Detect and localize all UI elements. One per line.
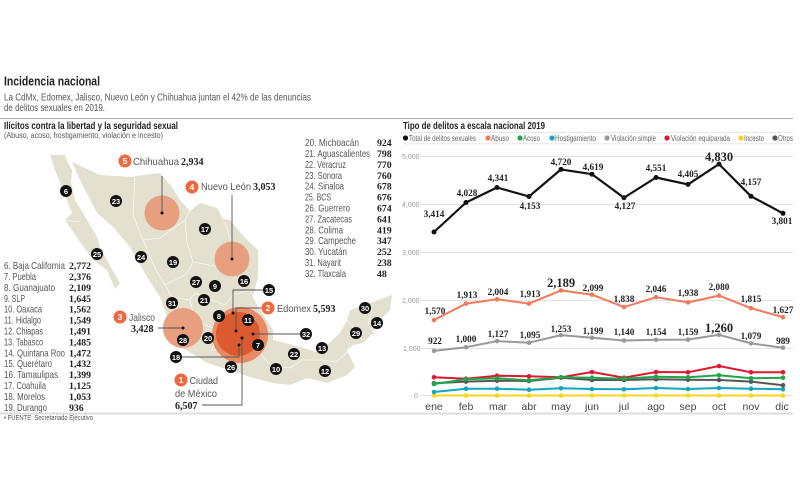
state ranking list right: 26. Guerrero <box>305 202 350 214</box>
x axis months: may <box>551 401 572 413</box>
state ranking list left: 1,485 <box>69 338 91 348</box>
y axis and grid: 1,000 <box>403 346 421 353</box>
y axis and grid <box>402 154 793 400</box>
callout: Edomex: 5,593 <box>313 304 336 315</box>
legend: Abuso <box>491 134 509 143</box>
callout: Jalisco: 3 <box>118 312 123 322</box>
series: total de delitos sexuales: 4,619 <box>583 162 604 172</box>
state number badges: 18 <box>172 353 180 362</box>
state ranking list right: 252 <box>377 247 392 258</box>
x axis months: sep <box>680 401 697 413</box>
state ranking list left: 12. Chiapas <box>4 326 43 338</box>
state ranking list left: 2,772 <box>69 261 91 272</box>
series: total de delitos sexuales: 4,127 <box>615 201 636 211</box>
series: violación simple: 1,140 <box>614 327 635 337</box>
state number badges: 30 <box>361 304 369 313</box>
series: violación simple: 1,127 <box>488 329 509 339</box>
series: violación simple <box>428 321 790 353</box>
state ranking list right: 20. Michoacán <box>305 137 359 149</box>
intro text: La CdMx, Edomex, Jalisco, Nuevo León y Chihuahua juntan el 42% de las denuncias <box>4 92 311 104</box>
callout: Chihuahua <box>118 154 204 168</box>
state number badges <box>60 185 383 377</box>
state ranking list right: 22. Veracruz <box>305 159 346 171</box>
series: violación simple: 989 <box>776 336 790 346</box>
y axis and grid: 3,000 <box>402 250 420 257</box>
series: total de delitos sexuales: 4,551 <box>646 163 667 173</box>
state ranking list left: 1,491 <box>69 326 91 338</box>
state ranking list right: 674 <box>377 204 392 214</box>
series: abuso: 1,838 <box>614 294 635 304</box>
leader lines <box>158 176 300 405</box>
series: total de delitos sexuales: 3,414 <box>424 209 445 219</box>
legend: Hostigamiento <box>555 134 596 143</box>
series: abuso: 1,815 <box>741 294 762 304</box>
state ranking list left: 2,376 <box>69 272 91 283</box>
callout: Edomex: Edomex <box>277 303 312 315</box>
series: abuso: 2,099 <box>583 283 604 293</box>
state ranking list right: 23. Sonora <box>305 170 342 182</box>
state ranking list right: 24. Sinaloa <box>305 180 344 192</box>
state ranking list left: 11. Hidalgo <box>4 314 41 326</box>
state ranking list right: 924 <box>377 138 392 149</box>
state ranking list left: 16. Tamaulipas <box>4 369 58 381</box>
state number badges: 28 <box>179 336 187 345</box>
x axis months: jun <box>584 401 599 413</box>
series: abuso: 2,004 <box>488 287 509 297</box>
y axis and grid: 0 <box>414 393 418 400</box>
series: otros <box>432 375 785 388</box>
x axis months: feb <box>459 401 473 413</box>
series: total de delitos sexuales: 4,720 <box>551 157 572 167</box>
state ranking list right: 28. Colima <box>305 224 343 236</box>
state number badges: 17 <box>201 225 209 234</box>
state number badges: 19 <box>169 258 177 267</box>
legend: Violación equiparada <box>671 134 730 143</box>
chart title: Tipo de delitos a escala nacional 2019 <box>403 121 545 132</box>
callout: Chihuahua: 2,934 <box>181 157 204 168</box>
state ranking list left: 936 <box>69 403 84 414</box>
state ranking list right: 32. Tlaxcala <box>305 268 346 280</box>
series: abuso: 2,189 <box>547 276 575 290</box>
series: violación simple: 1,154 <box>646 327 667 337</box>
state ranking list right: 676 <box>377 192 392 204</box>
callout: Edomex: 2 <box>266 303 271 313</box>
state ranking list left: 6. Baja California <box>4 260 65 272</box>
series: violación simple: 922 <box>428 336 442 346</box>
state ranking list left: 1,432 <box>69 359 91 370</box>
map heading: Ilícitos contra la libertad y la seguridad sexual <box>4 121 178 132</box>
y axis and grid: 4,000 <box>402 202 420 209</box>
state number badges: 8 <box>217 312 221 321</box>
state number badges: 27 <box>192 278 200 287</box>
x axis months: jul <box>618 401 629 413</box>
state ranking list right: 641 <box>377 214 392 226</box>
state ranking list right: 27. Zacatecas <box>305 214 352 226</box>
state number badges: 20 <box>204 334 212 343</box>
callout: Jalisco <box>114 310 155 335</box>
series: violación simple: 1,095 <box>520 330 541 340</box>
legend: Acoso <box>523 134 540 143</box>
series: total de delitos sexuales <box>424 150 793 234</box>
state number badges: 12 <box>321 367 329 376</box>
state ranking list left: 9. SLP <box>4 293 25 305</box>
state ranking list left: 15. Querétaro <box>4 358 52 370</box>
state ranking list left: 7. Puebla <box>4 271 36 283</box>
state ranking list left: 10. Oaxaca <box>4 304 42 316</box>
state number badges: 32 <box>302 330 310 339</box>
state ranking list right: 30. Yucatán <box>305 246 347 258</box>
callout: Jalisco: 3,428 <box>131 324 154 335</box>
panel: line chart <box>402 121 794 413</box>
series: abuso: 1,913 <box>457 290 478 300</box>
map heading <box>4 121 178 140</box>
state number badges: 31 <box>168 299 176 308</box>
state ranking list left: 1,399 <box>69 370 91 381</box>
state number badges: 23 <box>112 197 120 206</box>
series: total de delitos sexuales: 4,341 <box>488 173 509 183</box>
bubble: Chihuahua <box>144 196 180 230</box>
state number badges: 15 <box>265 286 273 295</box>
state ranking list left <box>4 260 91 414</box>
bubble: Edomex <box>212 307 268 363</box>
callout: Jalisco: Jalisco <box>129 312 155 324</box>
series: total de delitos sexuales: 4,028 <box>457 188 478 198</box>
series: violación simple: 1,000 <box>456 334 477 344</box>
series: violación simple: 1,079 <box>741 331 762 341</box>
series: total de delitos sexuales: 4,153 <box>520 201 541 211</box>
state number badges: 26 <box>227 363 235 372</box>
state ranking list left: 19. Durango <box>4 402 47 414</box>
x axis months: ago <box>647 401 665 413</box>
series: abuso: 1,627 <box>773 305 794 315</box>
bubble: Nuevo León <box>214 242 250 276</box>
callout: Ciudad de México <box>174 374 218 412</box>
series: abuso: 1,913 <box>520 289 541 299</box>
series: abuso <box>425 276 794 322</box>
series: incesto <box>432 393 785 398</box>
state ranking list left: 13. Tabasco <box>4 336 43 348</box>
state number badges: 29 <box>352 329 360 338</box>
callout: Ciudad de México: 1 <box>179 375 184 385</box>
state number badges: 9 <box>213 282 217 291</box>
state ranking list right: 238 <box>377 258 392 269</box>
state number badges: 6 <box>64 187 68 196</box>
callout: Edomex <box>262 302 336 315</box>
state ranking list left: 18. Morelos <box>4 391 45 403</box>
legend: Incesto <box>744 134 764 143</box>
map heading: (Abuso, acoso, hostigamiento, violación e incesto) <box>4 130 163 140</box>
state ranking list left: 1,645 <box>69 294 91 305</box>
state ranking list left: 1,549 <box>69 316 91 326</box>
callout: Nuevo León <box>186 180 276 194</box>
series: abuso: 2,080 <box>709 282 730 292</box>
x axis months: abr <box>521 401 537 413</box>
state ranking list right: 48 <box>377 269 387 280</box>
bubble: Ciudad de México <box>216 312 260 356</box>
state ranking list left: 1,562 <box>69 304 91 316</box>
map of Mexico <box>50 155 392 385</box>
state number badges: 25 <box>93 250 101 259</box>
state ranking list left: 17. Coahuila <box>4 380 46 392</box>
intro text <box>4 92 311 114</box>
legend <box>403 134 793 143</box>
state ranking list right: 31. Nayarit <box>305 257 341 269</box>
state ranking list right: 21. Aguascalientes <box>305 148 370 160</box>
legend: Violación simple <box>611 134 656 143</box>
x axis months: oct <box>712 401 726 413</box>
state ranking list right: 419 <box>377 226 392 236</box>
state ranking list right <box>305 137 392 280</box>
state ranking list right: 29. Campeche <box>305 235 356 247</box>
x axis months: mar <box>489 401 508 413</box>
bubble: Jalisco <box>163 308 203 348</box>
callout: Nuevo León: 3,053 <box>253 182 276 193</box>
series: acoso <box>432 373 785 386</box>
state number badges: 24 <box>137 253 146 262</box>
state number badges: 22 <box>290 350 298 359</box>
state ranking list left: 1,053 <box>69 392 91 403</box>
state ranking list left: 1,125 <box>69 381 91 392</box>
panel: map <box>4 121 392 414</box>
callout: Chihuahua: Chihuahua <box>133 156 179 168</box>
state ranking list left: 8. Guanajuato <box>4 282 55 294</box>
legend: Otros <box>778 134 793 143</box>
state ranking list right: 25. BCS <box>305 192 331 204</box>
state number badges: 14 <box>373 319 382 328</box>
state number badges: 7 <box>256 341 260 350</box>
x axis months <box>425 401 789 413</box>
state number badges: 10 <box>272 365 280 374</box>
source note: • FUENTE: Secretariado Ejecutivo <box>4 413 93 422</box>
callout: Nuevo León: 4 <box>190 182 195 192</box>
x axis months: ene <box>425 401 443 413</box>
state number badges: 16 <box>240 277 248 286</box>
callout: Ciudad de México: de México <box>175 388 217 400</box>
state ranking list right: 347 <box>377 236 392 247</box>
title: Incidencia nacional <box>4 74 100 88</box>
series: violación simple: 1,199 <box>583 326 604 336</box>
series: total de delitos sexuales: 4,157 <box>741 177 762 187</box>
legend: Total de delitos sexuales <box>409 134 476 143</box>
state ranking list right: 678 <box>377 182 392 192</box>
state ranking list left: 1,472 <box>69 348 91 360</box>
series: hostigamiento <box>432 386 785 394</box>
series: abuso: 2,046 <box>646 284 667 294</box>
callout: Ciudad de México: Ciudad <box>190 375 218 387</box>
callout: Nuevo León: Nuevo León <box>201 181 251 193</box>
state number badges: 13 <box>318 344 326 353</box>
series: total de delitos sexuales: 4,405 <box>678 169 699 179</box>
state ranking list right: 798 <box>377 149 392 160</box>
series: violación equiparada <box>432 364 785 381</box>
callout: Ciudad de México: 6,507 <box>175 401 198 412</box>
series: total de delitos sexuales: 4,830 <box>705 150 733 164</box>
callout: Chihuahua: 5 <box>123 156 128 166</box>
state number badges: 11 <box>244 316 252 325</box>
x axis months: nov <box>743 401 760 413</box>
intro text: de delitos sexuales en 2019. <box>4 103 105 114</box>
state number badges: 21 <box>200 296 208 305</box>
state ranking list right: 770 <box>377 160 392 171</box>
series: violación simple: 1,253 <box>551 324 572 334</box>
state ranking list left: 2,109 <box>69 283 91 294</box>
series: abuso: 1,570 <box>425 306 446 316</box>
series: violación simple: 1,260 <box>705 321 733 335</box>
state ranking list left: 14. Quintana Roo <box>4 348 65 360</box>
y axis and grid: 5,000 <box>402 154 420 161</box>
x axis months: dic <box>775 401 789 413</box>
y axis and grid: 2,000 <box>402 298 420 305</box>
series: total de delitos sexuales: 3,801 <box>772 216 793 226</box>
state ranking list right: 760 <box>377 171 392 182</box>
series: violación simple: 1,159 <box>678 327 699 337</box>
series: abuso: 1,938 <box>678 288 699 298</box>
